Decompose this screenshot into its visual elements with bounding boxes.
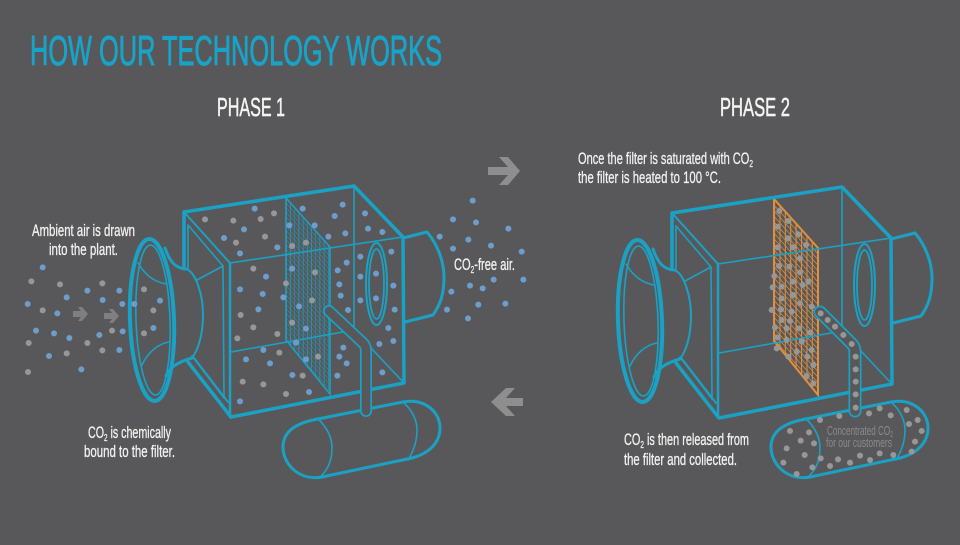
text: filter heated [578,149,753,187]
text: CO2-free air: 2 [471,265,475,276]
text: CO2 released: the filter and collected. [624,450,737,469]
text: CO2-free air [454,255,515,276]
heading: phase 2: PHASE 2 [720,92,790,122]
text: CO2-free air: -free air. [474,255,515,274]
panel: phase 2 plant [615,187,932,478]
text: concentrated CO2 label: Concentrated CO [827,423,928,438]
plant frame: phase 1 [127,186,444,417]
text: filter heated: the filter is heated to 100 °C. [578,168,721,187]
text: concentrated CO2 label: 2 [890,430,893,439]
heading: phase 1: PHASE 1 [217,92,285,122]
text: ambient air: Ambient air is drawn [32,221,135,240]
text: CO2 bound: CO [88,423,114,442]
pipe: phase 1 [329,311,366,411]
filter mesh: phase 1 [286,198,330,394]
arrow: forward [488,157,520,185]
text: filter heated: Once the filter is saturated with CO [578,149,842,168]
filter mesh: heated orange filter [774,199,818,395]
CO2 molecules: filter, pipe and tank [772,211,922,474]
small flow arrows [73,307,119,323]
text: CO2 released: 2 [640,440,644,451]
text: CO2 bound [84,423,175,461]
air molecules: outgoing CO2-free air [440,201,523,318]
air molecules: incoming and inside plant [28,205,395,401]
pipe: phase 2 [820,312,855,411]
text: filter heated: 2 [749,159,753,170]
text: CO2 released: CO [624,430,650,449]
plant frame: phase 2 [615,187,932,418]
text: CO2 released: is then released from [644,430,749,449]
title: HOW OUR TECHNOLOGY WORKS [30,27,442,74]
text: ambient air [32,221,135,259]
text: ambient air: into the plant. [49,240,118,259]
text: concentrated CO2 label: for our customers [826,435,892,450]
text: concentrated CO2 label [826,423,893,450]
text: CO2-free air: CO [454,255,480,274]
arrow: back [491,388,523,416]
text: CO2 bound: is chemically [108,423,171,442]
collection tank: phase 2 [771,401,928,478]
text: CO2 bound: bound to the filter. [84,442,175,461]
collection tank: phase 1 [283,401,440,478]
text: CO2 bound: 2 [104,433,108,444]
panel: phase 1 plant [28,186,523,478]
text: CO2 released [624,430,749,469]
